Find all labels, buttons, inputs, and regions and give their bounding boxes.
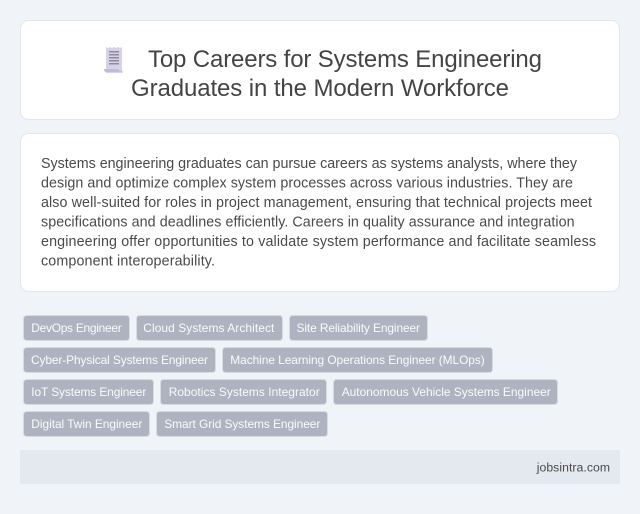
description line 4: specifications and deadlines efficiently. Careers in quality assurance and integration — [41, 214, 575, 230]
tag: Digital Twin Engineer — [31, 417, 142, 431]
heading line 2: Graduates in the Modern Workforce — [131, 75, 509, 102]
tag: Autonomous Vehicle Systems Engineer — [342, 385, 551, 399]
tag — [136, 316, 282, 340]
tag: IoT Systems Engineer — [31, 385, 146, 399]
tag: DevOps Engineer — [31, 321, 122, 335]
heading line 1: Top Careers for Systems Engineering — [148, 46, 542, 73]
tag: Site Reliability Engineer — [296, 321, 420, 335]
tag — [156, 412, 328, 436]
footer bar — [20, 450, 620, 484]
tag group: careers — [24, 316, 558, 436]
description line 6: component interoperability. — [41, 254, 215, 270]
description line 1: Systems engineering graduates can pursue careers as systems analysts, where they — [41, 156, 578, 172]
tag — [24, 348, 216, 372]
tag — [24, 316, 130, 340]
tag: Cloud Systems Architect — [143, 321, 275, 335]
description line 5: engineering offer opportunities to validate system performance and facilitate seamless — [41, 234, 596, 250]
tag: Machine Learning Operations Engineer (MLOps) — [230, 353, 485, 367]
tag — [24, 380, 154, 404]
footer source text: jobsintra.com — [536, 460, 610, 474]
panel: title card — [20, 20, 620, 120]
description line 3: also well-suited for roles in project management, ensuring that technical projects meet — [41, 195, 592, 211]
icon: document scroll — [104, 47, 123, 73]
tag: Smart Grid Systems Engineer — [164, 417, 320, 431]
tag — [334, 380, 558, 404]
tag — [290, 316, 428, 340]
tag: Cyber-Physical Systems Engineer — [31, 353, 208, 367]
tag — [160, 380, 326, 404]
tag: Robotics Systems Integrator — [169, 385, 320, 399]
description line 2: design and optimize complex system processes across various industries. They are — [41, 176, 573, 192]
tag — [24, 412, 150, 436]
panel: description — [20, 134, 620, 292]
tag — [222, 348, 492, 372]
